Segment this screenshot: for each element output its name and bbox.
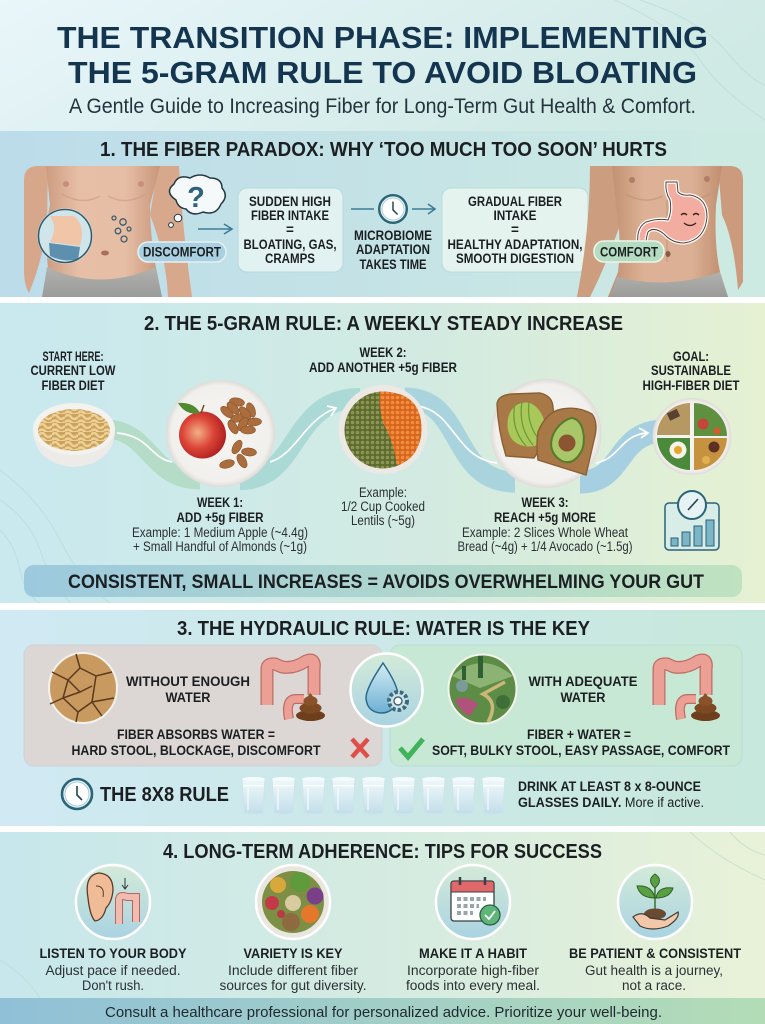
tip: make it a habit [406,865,540,993]
label: comfort: COMFORT [600,244,659,260]
text: week 3: Bread (~4g) + 1/4 Avocado (~1.5g) [458,539,632,554]
label: comfort [594,241,664,262]
label: start here: CURRENT LOW [30,363,116,378]
tip: be patient and consistent: not a race. [622,978,686,993]
text: week 2 heading: ADD ANOTHER +5g FIBER [309,360,457,375]
text: week 3 [458,495,632,554]
label: start here [30,349,116,393]
icon: bowl of varied foods [256,865,330,939]
image: healthy torso [577,166,743,297]
footer: Consult a healthcare professional for personalized advice. Prioritize your well-being. [105,1004,662,1021]
image: bowl of lentils [338,385,428,474]
box: gradual fiber intake [442,188,588,272]
text: drink at least [518,779,704,810]
box: sudden high fiber intake: = [286,222,294,237]
box: gradual fiber intake: = [511,222,519,237]
tip: listen to your body [40,865,186,993]
label: goal: GOAL: [673,349,709,364]
panel: the hydraulic rule [0,610,765,826]
text: week 3: REACH +5g MORE [494,510,596,525]
tip: variety is key: VARIETY IS KEY [244,946,342,961]
text: fiber plus water: FIBER + WATER = [527,727,631,742]
text: fiber plus water: SOFT, BULKY STOOL, EASY PASSAGE, COMFORT [432,743,731,758]
panel: long-term adherence [0,832,765,998]
arrow ribbon: progress path [105,398,665,482]
banner: consistent small increases: CONSISTENT, SMALL INCREASES = AVOIDS OVERWHELMING YOUR GUT [68,572,704,593]
text: with adequate water: WITH ADEQUATE [528,674,638,689]
arrow: to sudden intake [198,224,232,234]
text: fiber plus water [432,727,731,758]
text: with adequate water [528,674,638,705]
image: plate with avocado toast [490,379,602,488]
label: start here: FIBER DIET [42,378,105,393]
subtitle: A Gentle Guide to Increasing Fiber for Long-Term Gut Health & Comfort. [69,95,696,118]
heading: section 4: 4. LONG-TERM ADHERENCE: TIPS FOR SUCCESS [163,840,602,863]
text: with adequate water: WATER [560,690,606,705]
tip: listen to your body: Adjust pace if needed. [46,963,180,978]
image: plate with apple and almonds [166,380,275,487]
text: week 2 heading: WEEK 2: [360,345,406,360]
text: week 1 [132,495,308,554]
heading: section 2: 2. THE 5-GRAM RULE: A WEEKLY STEADY INCREASE [144,312,623,335]
tip: listen to your body: Don't rush. [82,978,144,993]
text: week 1: ADD +5g FIBER [176,510,264,525]
text: fiber absorbs water: HARD STOOL, BLOCKAGE, DISCOMFORT [72,743,321,758]
tip: be patient and consistent: BE PATIENT & CONSISTENT [569,946,742,961]
text: microbiome adaptation: TAKES TIME [360,257,426,272]
image: goal plate [652,398,732,475]
tip: variety is key: Include different fiber [228,963,359,978]
icon: 8x8 clock [62,779,92,809]
banner: consistent small increases [24,565,742,597]
text: week 2 example: Example: [359,485,407,500]
label: discomfort [138,242,226,262]
tip: be patient and consistent: Gut health is a journey, [585,963,723,978]
panel: the fiber paradox [0,131,765,297]
text: without enough water [126,674,250,705]
text: week 1: Example: 1 Medium Apple (~4.4g) [132,525,308,540]
text: week 2 example: 1/2 Cup Cooked [341,499,425,514]
label: start here: START HERE: [42,349,104,364]
icon: thought bubble with question mark [169,175,225,227]
text: without enough water: WATER [166,690,211,705]
icon: thought bubble with question mark: ? [187,182,205,214]
text: the 8x8 rule: THE 8X8 RULE [100,784,229,806]
icon: water drop with gear [350,654,422,726]
icon: hand holding seedling [618,865,692,939]
icon: colon with hard stool [267,660,325,721]
tip: be patient and consistent [569,865,742,993]
text: fiber absorbs water [72,727,321,758]
icon: colon with soft stool [659,660,720,721]
icon: happy stomach [638,182,707,244]
text: microbiome adaptation: MICROBIOME [354,228,432,243]
panel: the 5-gram rule [0,303,765,603]
box: gradual fiber intake: HEALTHY ADAPTATION, [448,237,582,252]
title: THE TRANSITION PHASE: IMPLEMENTING [57,20,708,55]
panel: without enough water [24,645,382,766]
title [57,20,708,90]
icon: gas bubbles [112,216,131,242]
icon: gauge and bar chart [665,491,719,550]
tip: variety is key [220,865,366,993]
icon: red cross [352,739,368,757]
panel: with adequate water [390,645,742,766]
text: without enough water: WITHOUT ENOUGH [126,674,250,689]
label: goal [642,349,740,393]
label: goal: HIGH-FIBER DIET [642,378,740,393]
box: gradual fiber intake: SMOOTH DIGESTION [456,251,574,266]
box: gradual fiber intake: INTAKE [494,208,536,223]
tip: make it a habit: Incorporate high-fiber [407,963,540,978]
text: week 3: Example: 2 Slices Whole Wheat [462,525,628,540]
icon: green check [400,739,423,757]
box: sudden high fiber intake: CRAMPS [265,251,315,266]
icon: clock with arrow [351,195,435,223]
tip: listen to your body: LISTEN TO YOUR BODY [40,946,186,961]
box: gradual fiber intake: GRADUAL FIBER [468,194,562,209]
heading: section 1: 1. THE FIBER PARADOX: WHY ‘TOO MUCH TOO SOON’ HURTS [100,138,667,161]
tip: make it a habit: MAKE IT A HABIT [419,946,528,961]
icon: calendar with check [436,865,510,939]
text: week 1: WEEK 1: [197,495,243,510]
box: sudden high fiber intake: FIBER INTAKE [251,208,329,223]
image: cracked earth [49,653,117,723]
text: drink at least: DRINK AT LEAST 8 x 8-OUNCE [518,779,701,794]
image: bloated torso [24,166,192,297]
icon: ear and gut [76,865,150,939]
image: garden [448,654,516,724]
header background [0,0,765,131]
text: drink at least: GLASSES DAILY. More if active. [518,795,704,810]
box: sudden high fiber intake: BLOATING, GAS, [244,237,336,252]
icons: nine water glasses [242,777,505,814]
box: sudden high fiber intake: SUDDEN HIGH [249,194,331,209]
box: sudden high fiber intake [238,188,343,272]
text: fiber absorbs water: FIBER ABSORBS WATER = [117,727,275,742]
text: week 3: WEEK 3: [522,495,568,510]
heading: section 3: 3. THE HYDRAULIC RULE: WATER IS THE KEY [177,617,590,640]
tip: make it a habit: foods into every meal. [406,978,540,993]
icon: bloated belly inset [38,210,92,262]
text: microbiome adaptation [354,228,432,272]
text: week 2 example: Lentils (~5g) [351,513,415,528]
label: goal: SUSTAINABLE [651,363,731,378]
text: week 2 heading [309,345,457,375]
footer [0,998,765,1024]
text: week 1: + Small Handful of Almonds (~1g) [133,539,307,554]
title: THE 5-GRAM RULE TO AVOID BLOATING [68,55,697,90]
label: discomfort: DISCOMFORT [143,244,222,260]
image: bowl of low-fiber food [33,403,115,467]
text: microbiome adaptation: ADAPTATION [356,242,430,257]
tip: variety is key: sources for gut diversity. [220,978,366,993]
text: week 2 example [341,485,425,528]
